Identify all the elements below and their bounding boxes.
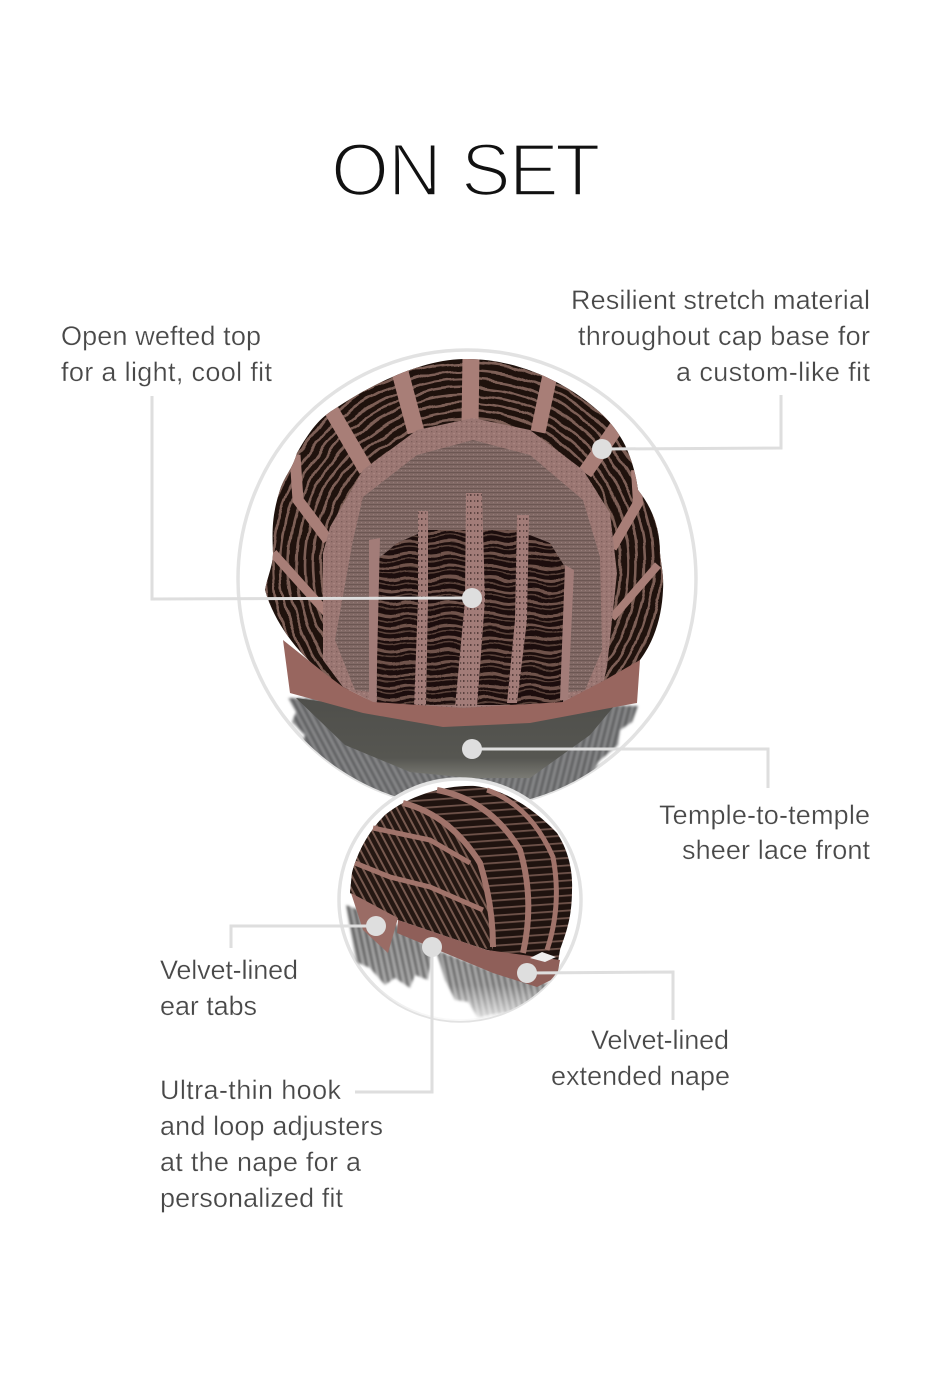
text: ear tabs (160, 955, 298, 1021)
text: hook and loop adjusters (160, 1075, 383, 1213)
text: hook and loop adjusters: personalized fit (160, 1183, 343, 1213)
inner mesh (335, 440, 602, 705)
front cap photo (255, 350, 677, 810)
ear tab (351, 893, 398, 953)
text: hook and loop adjusters: and loop adjusters (160, 1111, 383, 1141)
sheer lace front (296, 698, 615, 778)
text: open wefted top (61, 321, 272, 387)
leader: open wefted top (152, 396, 482, 608)
hair fringe (288, 698, 638, 810)
text: open wefted top: for a light, cool fit (61, 357, 272, 387)
leader: extended nape (517, 963, 673, 1020)
panel: small cap circle (339, 779, 581, 1025)
leader: stretch material (592, 395, 781, 459)
dome wefts (265, 359, 664, 690)
nape band (397, 920, 560, 987)
text: hook and loop adjusters: at the nape for a (160, 1147, 362, 1177)
text: resilient stretch material: throughout cap base for (578, 321, 870, 351)
weft left and right (350, 786, 572, 960)
text: temple-to-temple lace: Temple-to-temple (659, 800, 870, 830)
back cap photo (340, 780, 580, 1025)
title: ON SET (331, 128, 601, 212)
hair (344, 904, 548, 1021)
text: open wefted top: Open wefted top (61, 321, 261, 351)
text: ear tabs: ear tabs (160, 991, 257, 1021)
text: temple-to-temple lace (659, 800, 870, 865)
text: extended nape: extended nape (551, 1061, 730, 1091)
vertical dotted bands (369, 493, 574, 707)
main circle outline (238, 350, 696, 808)
leader: lace front (462, 739, 768, 788)
text: ear tabs: Velvet-lined (160, 955, 298, 985)
text: hook and loop adjusters: Ultra-thin hook (160, 1075, 342, 1105)
text: resilient stretch material: Resilient stretch material (571, 285, 870, 315)
hook and loop tab (530, 952, 556, 962)
text: temple-to-temple lace: sheer lace front (682, 835, 870, 865)
text: resilient stretch material (571, 285, 870, 387)
open wefted centre (377, 530, 565, 705)
leader: hook and loop (355, 937, 442, 1092)
small ribs (355, 790, 556, 953)
panel: main cap circle (238, 350, 696, 810)
bottom velvet band (283, 640, 640, 727)
leader: ear tabs (231, 916, 386, 948)
text: resilient stretch material: a custom-like fit (676, 357, 870, 387)
lace panel (323, 418, 617, 710)
text: extended nape: Velvet-lined (591, 1025, 729, 1055)
cap ribs (273, 355, 658, 618)
small circle outline (339, 779, 581, 1021)
text: extended nape (551, 1025, 730, 1091)
